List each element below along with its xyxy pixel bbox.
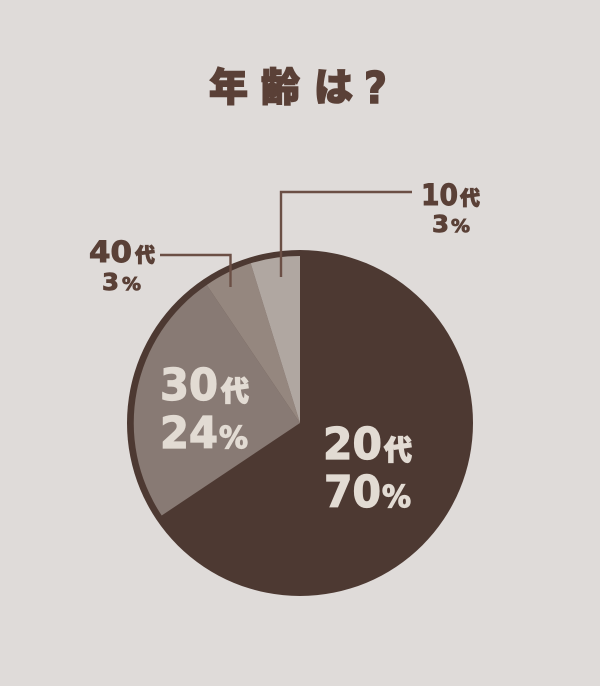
label: 30代 24%: 24: [160, 408, 218, 459]
label: 30代 24%: [160, 360, 249, 459]
label: 10代 3%: 代: [460, 187, 480, 210]
label: 40代 3%: [89, 235, 155, 296]
label: 40代 3%: %: [122, 274, 141, 295]
title: は: [314, 67, 353, 110]
label: 20代 70%: %: [382, 480, 411, 515]
leader line: 40代: [160, 255, 230, 287]
title: 齢: [261, 67, 300, 110]
leader line: 10代: [281, 192, 412, 277]
title: 年: [209, 67, 248, 110]
label: 10代 3%: [421, 178, 480, 238]
label: 40代 3%: 40: [89, 235, 132, 269]
slice: 10代 3%: [251, 256, 300, 423]
label: 30代 24%: 30: [160, 360, 218, 411]
title: [209, 63, 387, 114]
label: 30代 24%: 代: [221, 376, 249, 407]
label: 20代 70%: 20: [323, 419, 382, 470]
label: 30代 24%: %: [219, 421, 248, 456]
title: ?: [364, 63, 387, 114]
slice: 30代 24%: [134, 285, 300, 516]
outer ring: [127, 250, 473, 596]
pie chart: [127, 250, 473, 596]
label: 10代 3%: 3: [432, 212, 449, 238]
label: 10代 3%: %: [451, 216, 470, 237]
label: 20代 70%: 代: [384, 435, 412, 466]
label: 20代 70%: 70: [324, 467, 381, 518]
slice: 40代 3%: [207, 263, 300, 423]
label: 40代 3%: 代: [135, 244, 155, 267]
label: 10代 3%: 10: [421, 178, 458, 212]
label: 40代 3%: 3: [102, 270, 119, 296]
label: 20代 70%: [323, 419, 412, 518]
